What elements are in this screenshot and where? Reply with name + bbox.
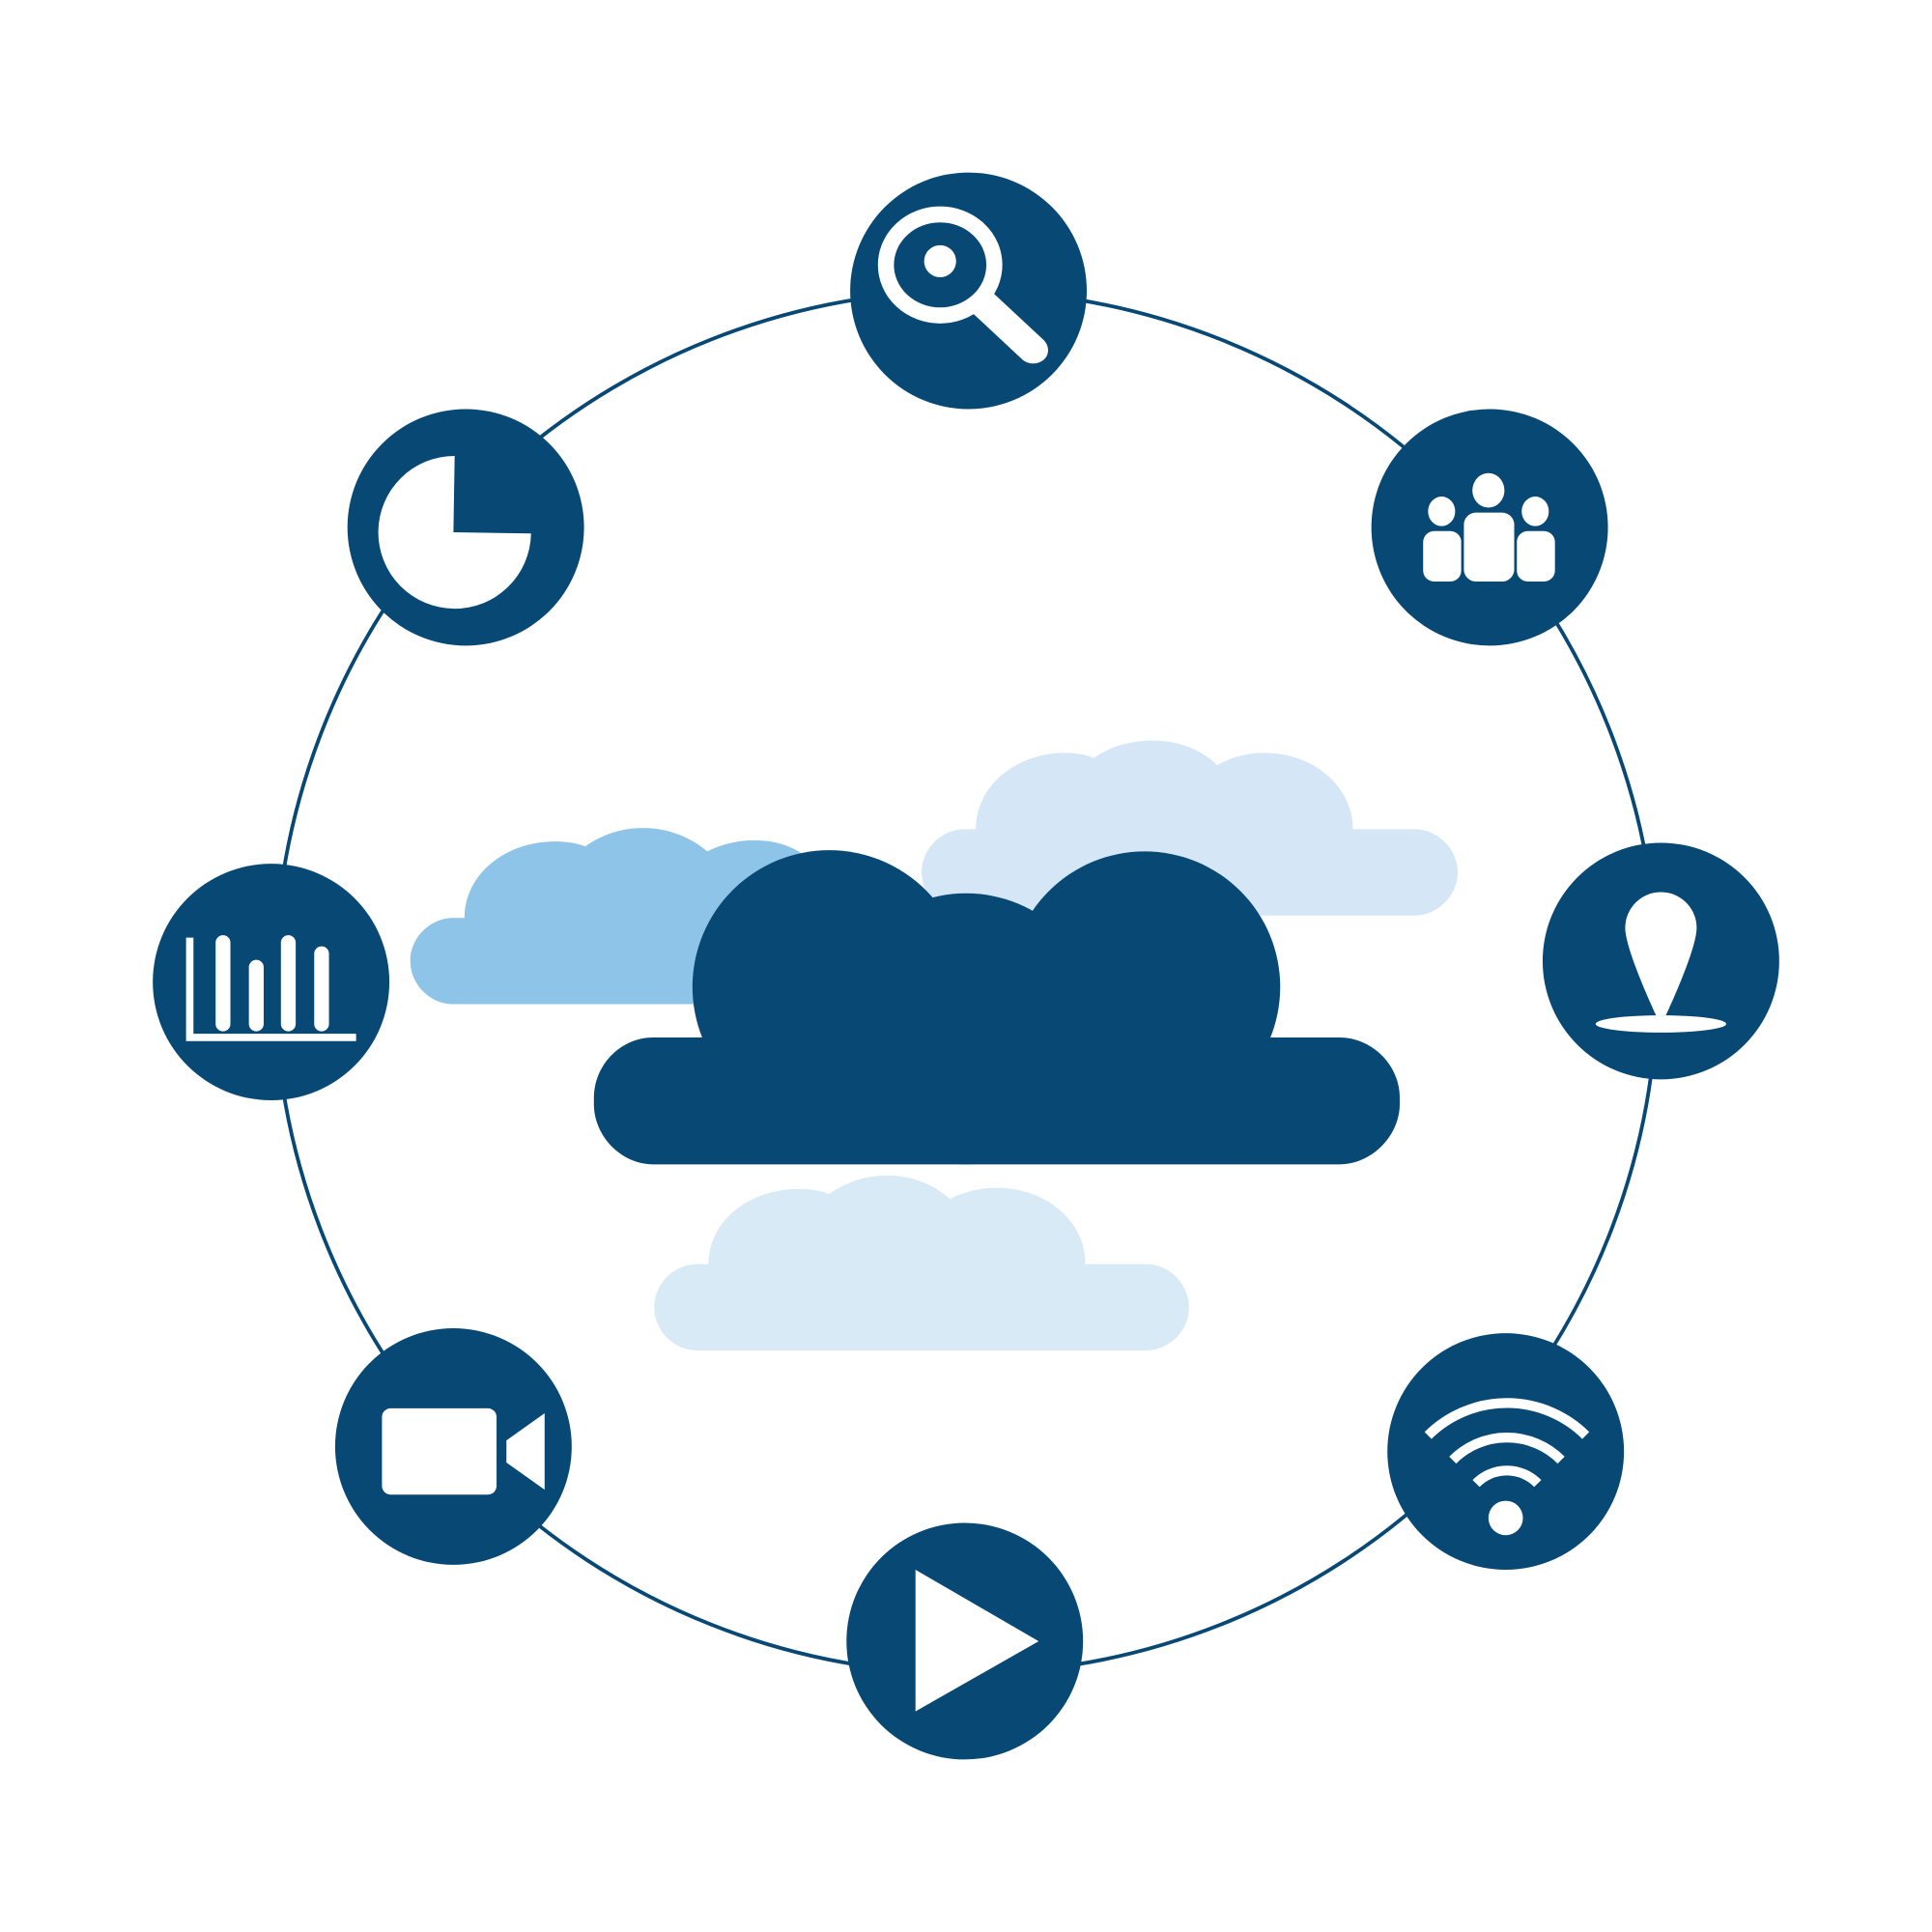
icon: play <box>846 1523 1083 1759</box>
cloud: mid blue left <box>411 828 832 1005</box>
cloud: light top right <box>922 741 1458 916</box>
icon: search <box>850 173 1087 409</box>
cloud: main dark <box>594 850 1400 1164</box>
icon: pie chart <box>348 409 584 645</box>
icon: location pin <box>1543 842 1779 1079</box>
icon: bar chart <box>153 864 389 1100</box>
ring <box>274 291 1658 1673</box>
icon: wifi <box>1387 1333 1624 1570</box>
cloud: light bottom <box>654 1176 1189 1350</box>
icon: video camera <box>335 1328 572 1565</box>
icon: people <box>1372 409 1608 645</box>
